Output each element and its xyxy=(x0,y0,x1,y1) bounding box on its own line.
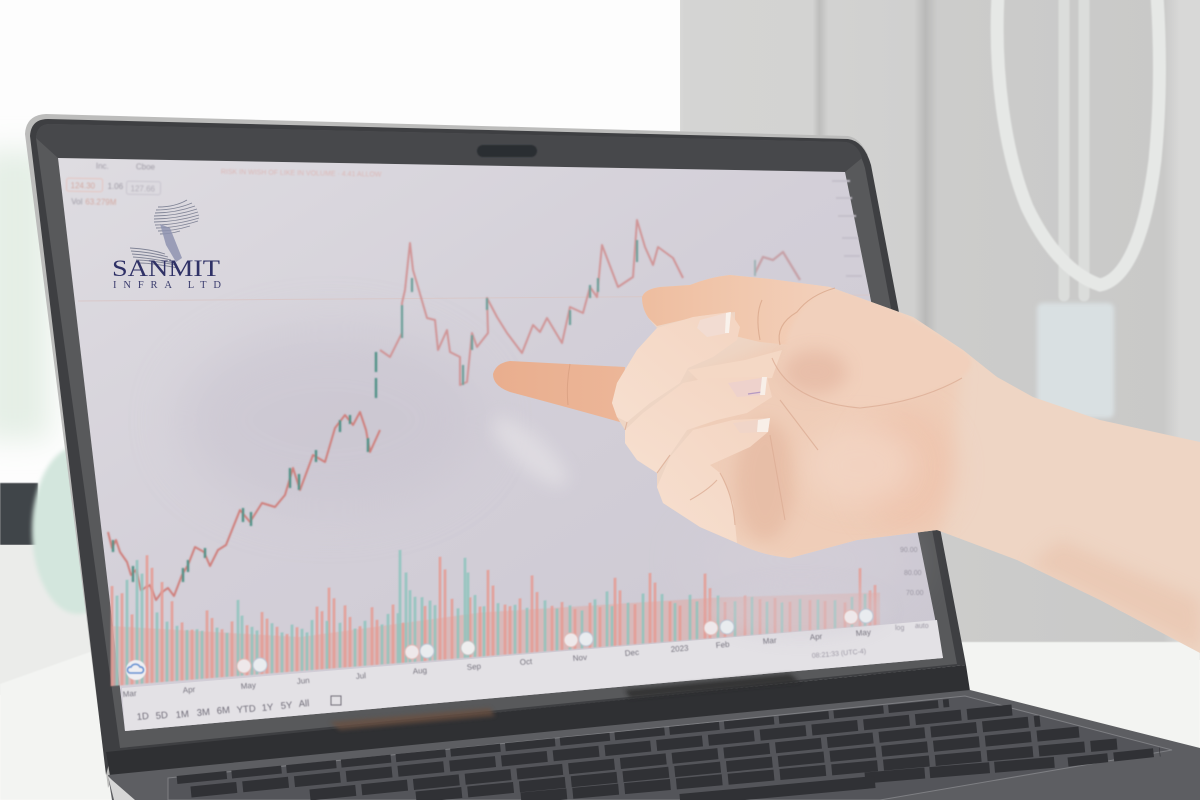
chart time axis: Jul xyxy=(355,671,367,681)
wrist warm tone xyxy=(900,432,944,513)
thenar pink shadow xyxy=(783,350,847,394)
background: dark window sill xyxy=(0,483,38,545)
forearm lower shade xyxy=(1040,544,1200,642)
chart time axis: Mar xyxy=(762,636,777,646)
background: green garden blur xyxy=(0,150,50,440)
keyboard well xyxy=(168,696,1172,800)
range selector buttons: All xyxy=(298,698,310,710)
screen header stats: 63.279M xyxy=(85,197,117,207)
thumb knuckle creases xyxy=(758,288,835,345)
left silver base corner xyxy=(108,776,135,800)
range selector buttons: YTD xyxy=(236,703,256,716)
background: bright window xyxy=(0,0,690,560)
logo swoosh xyxy=(130,200,199,268)
range selector buttons: 3M xyxy=(196,707,210,719)
screen header stats: 127.66 xyxy=(130,184,156,194)
background: wall below window xyxy=(0,545,120,695)
event markers on chart xyxy=(126,609,873,680)
screen bottom light panel xyxy=(122,620,943,731)
teal volume bars xyxy=(117,502,865,686)
ring nail white tip xyxy=(760,377,767,395)
horizontal price line xyxy=(78,295,870,301)
logo name: SANMIT xyxy=(112,256,220,281)
screen header stats: 124.30 xyxy=(70,181,96,191)
cloud icon xyxy=(127,664,144,673)
screen xyxy=(58,158,943,731)
little finger nail xyxy=(733,418,770,433)
top bezel shading xyxy=(36,124,862,172)
cord loop on the wall xyxy=(997,0,1159,296)
chart time axis: Sep xyxy=(466,662,482,672)
hand and forearm xyxy=(600,260,1200,660)
wall control box xyxy=(1037,303,1114,418)
keyboard keys xyxy=(177,703,1160,800)
range selector buttons: 1M xyxy=(175,709,189,721)
chart time axis: Jun xyxy=(296,676,310,686)
top right price axis xyxy=(832,181,862,276)
lid silver left and top edge xyxy=(25,114,868,788)
right corner chart readout: 80.00 xyxy=(904,570,922,577)
range selector buttons: 5D xyxy=(155,710,168,722)
reflections on screen xyxy=(180,330,910,605)
ring finger xyxy=(625,377,772,473)
chart time axis: May xyxy=(855,628,871,638)
lid bezel xyxy=(36,124,957,748)
range selector buttons: 1Y xyxy=(261,702,274,714)
laptop lid xyxy=(25,114,966,788)
middle finger xyxy=(612,312,740,422)
middle finger nail xyxy=(697,312,730,337)
chart time axis xyxy=(122,628,871,699)
red volume bars xyxy=(112,497,875,686)
screen header stats: 1.06 xyxy=(107,182,124,191)
volume mass underlay xyxy=(112,565,880,686)
middle nail white tip xyxy=(725,312,731,333)
faded right side veil over volume bars xyxy=(710,580,890,640)
right corner chart readout: log xyxy=(895,625,904,632)
lid dark outer rim xyxy=(30,119,966,775)
background: white table xyxy=(0,642,1200,800)
right corner chart readout: 90.00 xyxy=(900,547,918,554)
chart time axis: Dec xyxy=(624,648,639,658)
finger and palm creases xyxy=(625,358,962,525)
laptop hinge xyxy=(106,665,970,776)
gap between thumb and fingers xyxy=(690,335,785,372)
ring finger nail xyxy=(728,377,767,397)
index finger joint crease xyxy=(567,364,570,405)
company logo: Sanmit Infra Ltd xyxy=(112,200,221,291)
palm pink skin xyxy=(698,346,955,558)
candlestick price chart xyxy=(108,220,800,600)
bezel reflection dark patch xyxy=(625,674,800,698)
webcam xyxy=(477,145,537,157)
right corner chart readout: 70.00 xyxy=(906,590,924,597)
screen header stats: RISK IN WISH OF LIKE IN VOLUME · 4.41 ALLOW xyxy=(221,169,382,179)
thenar palm mound xyxy=(871,302,899,312)
screen header stats: Cboe xyxy=(136,162,156,172)
bezel reflection xyxy=(330,708,495,730)
range selector buttons: 1D xyxy=(136,711,149,723)
screen header stats: Vol xyxy=(71,197,83,206)
palm centre shadow xyxy=(735,420,795,540)
chart time axis: Mar xyxy=(122,689,137,699)
pointing hand xyxy=(493,260,1200,660)
range selector buttons: 5Y xyxy=(280,700,293,712)
range selector buttons: 6M xyxy=(216,705,230,717)
background: curtains xyxy=(680,0,1200,660)
chart time axis: Feb xyxy=(715,640,730,650)
chart time axis: Apr xyxy=(809,632,823,642)
screen header stats: Inc. xyxy=(96,162,109,171)
chart time axis: May xyxy=(240,681,256,691)
chart time axis: Apr xyxy=(182,685,196,695)
ring nail lilac stain xyxy=(748,392,762,394)
range selector buttons xyxy=(136,696,341,723)
little nail white tip xyxy=(757,418,770,432)
little finger xyxy=(657,418,770,543)
index finger behind xyxy=(493,361,625,422)
chart time axis: Aug xyxy=(412,666,427,676)
palm lower light xyxy=(822,431,912,502)
right corner chart readout: auto xyxy=(915,623,929,630)
thumb xyxy=(642,275,828,344)
background: mint ball object xyxy=(32,446,124,614)
right corner chart readout xyxy=(812,547,929,660)
volume bars xyxy=(112,497,880,686)
screen header stats xyxy=(66,161,382,212)
right corner chart readout: 08:21:33 (UTC-4) xyxy=(812,648,866,660)
forearm base skin xyxy=(612,287,1200,653)
chart time axis: Oct xyxy=(519,657,533,667)
back finger between ring and middle xyxy=(688,350,782,382)
logo subtitle: INFRA LTD xyxy=(113,280,221,291)
chart time axis: Nov xyxy=(572,653,587,663)
keyboard deck xyxy=(108,690,1200,800)
chart time axis: 2023 xyxy=(670,643,689,654)
